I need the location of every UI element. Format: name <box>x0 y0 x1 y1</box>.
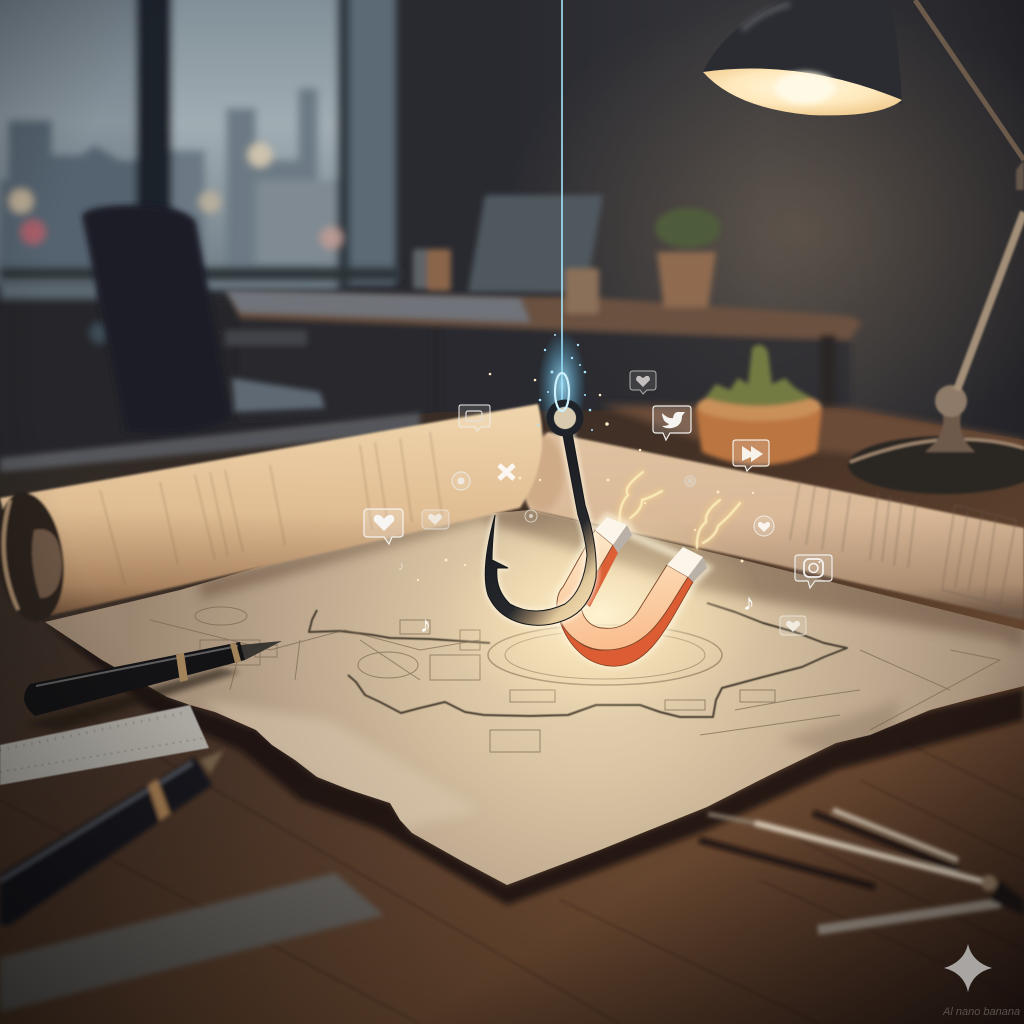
watermark text: Al nano banana <box>942 1006 1020 1018</box>
social icons <box>364 371 832 637</box>
paper sheet <box>45 510 1024 885</box>
icon: heart bubble large <box>364 509 403 544</box>
left paper roll <box>0 404 542 626</box>
icon: cross <box>499 465 514 479</box>
fountain pen: foreground <box>0 750 224 925</box>
office chair <box>82 205 325 434</box>
icon: circle center <box>525 510 537 522</box>
ruler: upper left <box>0 705 209 785</box>
icon: circle right <box>684 476 696 486</box>
magnet <box>557 517 707 666</box>
paper shadow <box>45 622 1024 905</box>
back desk <box>225 290 862 420</box>
icon: small heart box <box>422 510 449 529</box>
icon: instagram bubble <box>795 555 832 588</box>
flames <box>620 472 740 548</box>
lamp light on wall <box>500 0 1024 470</box>
magnet glow <box>435 510 765 720</box>
fish hook <box>485 373 596 625</box>
icon: heart circle <box>754 516 774 536</box>
background office <box>0 0 1024 470</box>
lamp base <box>848 160 1024 494</box>
cactus pot <box>696 345 822 465</box>
drafting tools on right <box>699 810 1024 930</box>
right paper roll <box>520 432 1024 620</box>
icon: play bubble <box>733 440 769 471</box>
ruler: foreground <box>0 873 384 1012</box>
desk surface <box>0 408 1024 1024</box>
fountain pen: on paper <box>24 641 282 730</box>
icon: heart box top <box>630 371 656 394</box>
icon: note right: ♪ <box>743 589 754 615</box>
watermark sparkle <box>944 944 992 992</box>
fishing line <box>538 0 586 440</box>
map details <box>150 607 1000 752</box>
desk lamp <box>703 0 1024 160</box>
icon: twitter bubble <box>653 406 691 440</box>
sparkles <box>417 373 754 581</box>
icon: circle left <box>452 472 470 490</box>
back laptop <box>468 195 603 292</box>
blurred mugs and plant <box>413 208 721 314</box>
icon: heart box right <box>780 616 806 635</box>
map contour lines <box>309 603 847 717</box>
map paper <box>45 500 1024 905</box>
icon: screen bubble <box>459 405 490 431</box>
icon: note left: ♪ <box>420 612 431 637</box>
icon: small note: ♪ <box>398 558 404 573</box>
